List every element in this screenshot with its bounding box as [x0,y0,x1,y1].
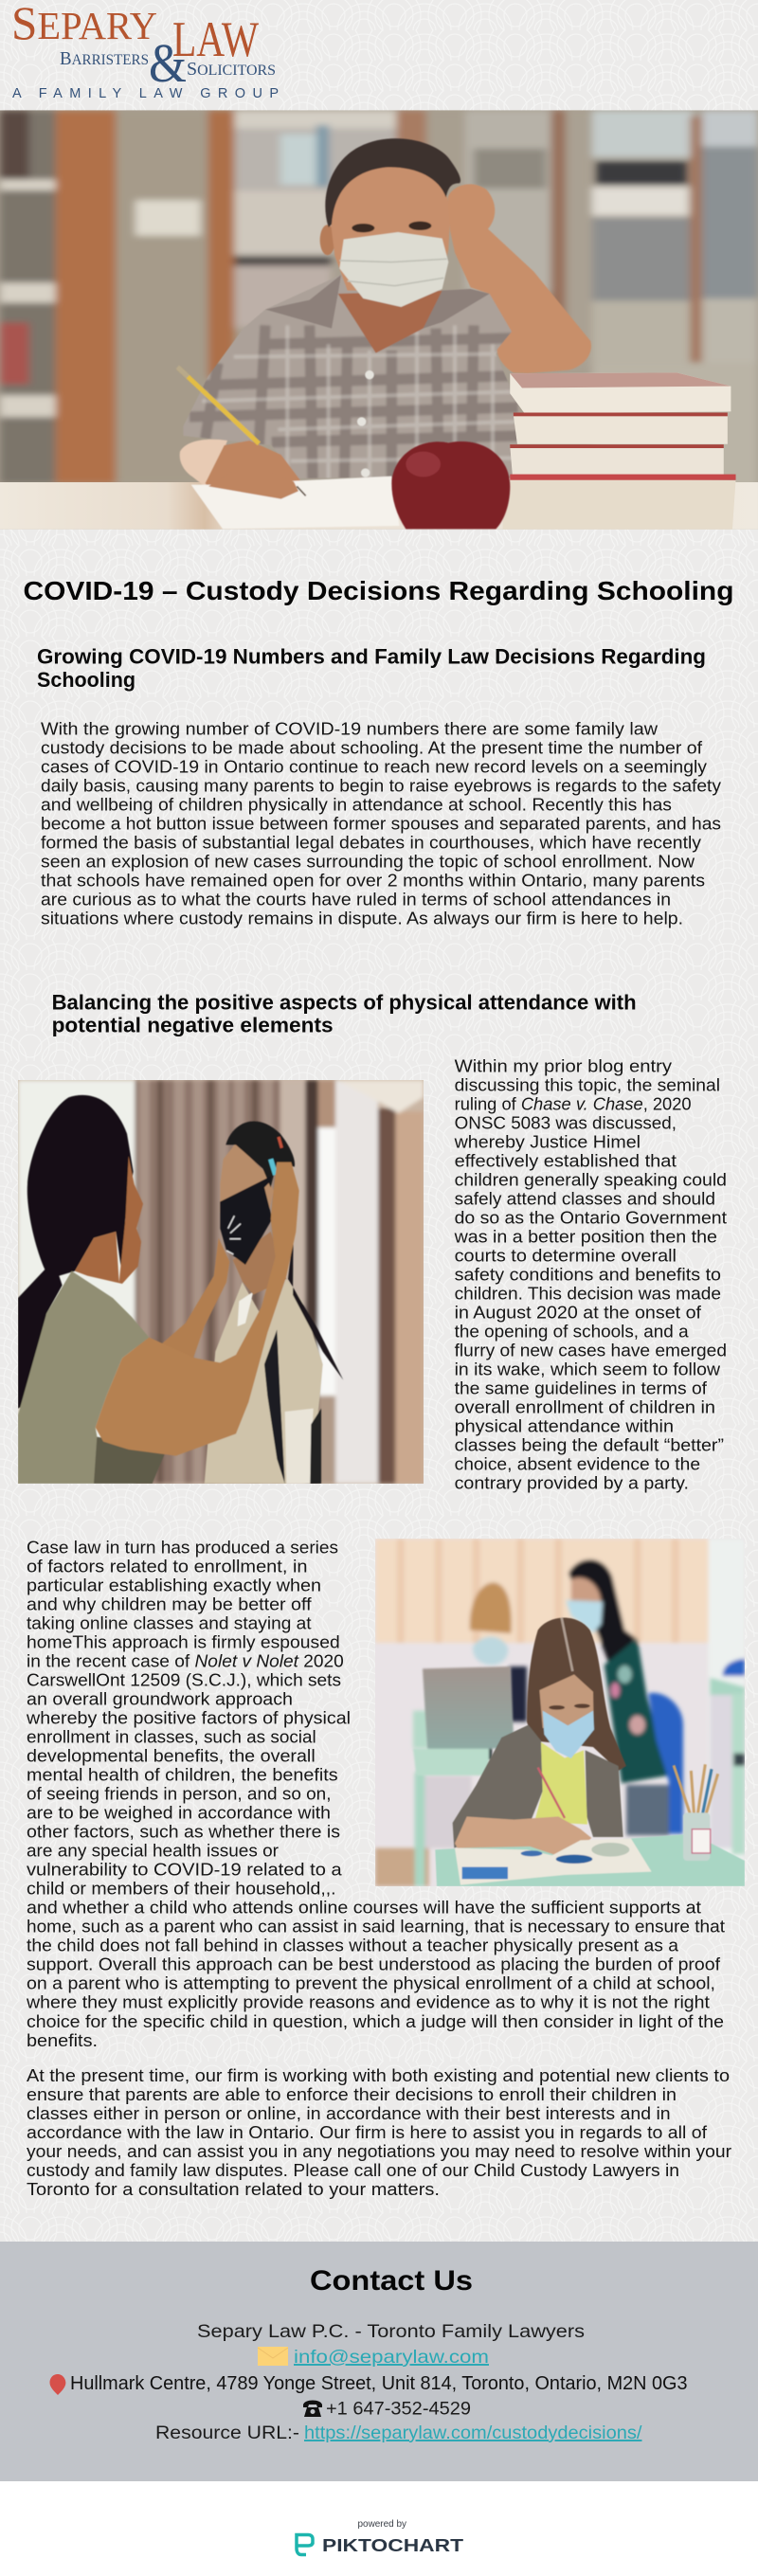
mask [543,1711,594,1758]
pencil [538,1768,565,1818]
bent arm and fist [448,184,591,373]
girl hair and ponytail [226,1121,295,1187]
woman hair [18,1095,134,1409]
footer: powered by piktochart [297,2518,464,2555]
icon: piktochart logo [297,2535,313,2554]
mask [339,232,448,307]
eyes [352,224,374,232]
arm [455,1816,591,1854]
pencil [178,368,259,443]
collar and neck [338,291,448,353]
text block: case law paragraph: are to be weighed in accordance with [27,1802,331,1822]
shirt [184,278,519,478]
text block: case law paragraph: CarswellOnt 12509 (S.C.J.), which sets [27,1669,341,1689]
text block: Chase v. Chase column: contrary provided by a party. [455,1473,689,1493]
text block: closing paragraph: classes either in person or online, in accordance with their best interests and in [27,2103,671,2123]
text block: Chase v. Chase column: children. This decision was made [455,1284,721,1304]
heading: growing numbers: Schooling [37,668,135,692]
title: COVID-19 – Custody Decisions Regarding Schooling [23,576,734,605]
laptop [413,1666,514,1775]
text block: Chase v. Chase column [454,1056,727,1493]
text block: case law paragraph: of seeing friends in person, and so on, [27,1783,332,1803]
heading: balancing aspects: Balancing the positive aspects of physical attendance with [52,990,637,1014]
text block: intro paragraph [41,719,722,928]
contact heading: Contact Us [310,2265,473,2297]
notebook [191,477,400,529]
text block: intro paragraph: cases of COVID-19 in Ontario continue to reach new record levels on a seemingly [41,757,708,777]
woman face [75,1156,143,1284]
icon: map pin [49,2374,65,2395]
text block: Chase v. Chase column: was in a better position then the [454,1227,717,1247]
text block: intro paragraph: formed the basis of substantial legal debates in courthouses, which have recently [41,833,702,853]
text block: Chase v. Chase column: ONSC 5083 was discussed, [455,1113,677,1133]
book [455,1839,652,1885]
heading: balancing aspects [52,990,637,1036]
text block: case law paragraph: support. Overall this approach can be best understood as placing the burden of proof [27,1954,721,1973]
girl shirt [205,1279,323,1484]
text block: case law paragraph: taking online classes and staying at [27,1612,312,1632]
text block: case law paragraph: the child does not fall behind in classes without a teacher physically present as a [27,1935,679,1955]
text block: case law paragraph: particular establishing exactly when [27,1575,321,1594]
ear [320,225,335,255]
text block: intro paragraph: and wellbeing of children physically in attendance at school. Recently this has [41,795,672,815]
text block: intro paragraph: that schools have remained open for over 2 months within Ontario, many parents [41,871,705,891]
boy [171,138,591,529]
panel: footer [0,2481,758,2576]
text block: Chase v. Chase column: the same guidelines in terms of [455,1378,708,1398]
firm name: Separy Law P.C. - Toronto Family Lawyers [197,2321,585,2342]
text block: Chase v. Chase column: physical attendance within [455,1416,674,1436]
email link: info@separylaw.com [294,2347,489,2368]
text block: Chase v. Chase column: ruling of Chase v. Chase, 2020 [455,1094,692,1114]
heading: growing numbers [37,645,706,692]
text block: Chase v. Chase column: safely attend classes and should [455,1189,715,1209]
photo: mother fitting mask on daughter [18,1080,424,1484]
text block: Chase v. Chase column: the opening of schools, and a [455,1322,689,1342]
logo: Separy Law [11,0,279,101]
text block: case law paragraph: benefits. [27,2030,98,2050]
text block: case law paragraph: in the recent case of Nolet v Nolet 2020 [27,1650,344,1670]
face [330,166,450,291]
text block: case law paragraph: whereby the positive factors of physical [26,1707,351,1727]
icon: envelope [258,2347,288,2366]
text block: closing paragraph: ensure that parents are able to enforce their decisions to enroll their children in [27,2084,677,2104]
hair [325,138,460,227]
text block: Chase v. Chase column: choice, absent evidence to the [455,1454,700,1474]
shirt shadow under arm [94,1437,167,1484]
yellow top [534,1742,587,1825]
far arm [162,1238,229,1358]
photo: boy in mask at library desk [0,110,758,530]
text block: case law paragraph: an overall groundwork approach [27,1688,293,1708]
text block: case law paragraph: are any special health issues or [27,1840,279,1860]
text block: case law paragraph: where they must explicitly provide reasons and evidence as to why it is not the right [26,1992,710,2012]
text block: closing paragraph: custody and family law disputes. Please call one of our Child Custody Lawyers in [27,2160,679,2180]
text block: case law paragraph: Case law in turn has produced a series [27,1537,338,1557]
logo: Separy Law: LAW [172,12,259,67]
footer: powered by piktochart: PIKTOCHART [322,2535,464,2555]
logo: Separy Law: SOLICITORS [187,59,276,80]
text block: Chase v. Chase column: Within my prior blog entry [455,1056,673,1076]
cardigan [453,1725,623,1848]
text block: case law paragraph: vulnerability to COVID-19 related to a [27,1859,342,1879]
text block: Chase v. Chase column: do so as the Ontario Government [455,1208,727,1228]
text block: closing paragraph: At the present time, our firm is working with both existing and potential new clients to [27,2065,730,2085]
icon: telephone [303,2401,322,2417]
footer: powered by piktochart: powered by [358,2518,407,2530]
photo: girl writing in classroom [375,1539,745,1886]
text block: intro paragraph: custody decisions to be made about schooling. At the present time the number of [41,738,703,758]
text block: case law paragraph: other factors, such as whether there is [27,1821,340,1841]
text block: case law paragraph: and whether a child who attends online courses will have the sufficient supports at [27,1897,701,1917]
text block: case law paragraph: enrollment in classes, such as social [27,1726,316,1746]
text block: Chase v. Chase column: courts to determine overall [455,1246,677,1266]
logo: Separy Law: A FAMILY LAW GROUP [12,86,279,101]
text block: case law paragraph: on a parent who is attempting to prevent the physical enrollment of a child at school, [27,1973,715,1992]
text block: Chase v. Chase column: effectively established that [455,1151,677,1171]
apple [391,441,510,529]
library background [0,110,758,530]
text block: case law paragraph: home, such as a parent who can assist in said learning, that is necessary to ensure that [27,1916,725,1936]
text block: case law paragraph: choice for the specific child in question, which a judge will then consider in light of the [27,2011,724,2031]
logo: Separy Law: BARRISTERS [60,48,149,69]
text block: closing paragraph [27,2065,731,2199]
phone number: +1 647-352-4529 [326,2399,471,2420]
text block: Chase v. Chase column: discussing this topic, the seminal [455,1075,720,1095]
text block: Chase v. Chase column: in its wake, which seem to follow [455,1360,721,1379]
text block: closing paragraph: your needs, and can assist you in any negotiations you may need to resolve within your [27,2141,731,2161]
text block: case law paragraph: child or members of their household,,. [27,1878,336,1898]
text block: Chase v. Chase column: children generally speaking could [455,1170,727,1190]
backpack strap [264,1329,285,1484]
text block: intro paragraph: With the growing number of COVID-19 numbers there are some family law [41,719,659,739]
text block: case law paragraph: homeThis approach is firmly espoused [27,1631,340,1651]
panel: contact us [0,2242,758,2481]
text block: case law paragraph: developmental benefits, the overall [27,1745,316,1765]
resource link: https://separylaw.com/custodydecisions/ [304,2423,642,2443]
resource label: Resource URL:- [155,2423,299,2443]
heading: growing numbers: Growing COVID-19 Numbers and Family Law Decisions Regarding [37,645,706,669]
book stack [503,372,736,530]
text block: Chase v. Chase column: in August 2020 at the onset of [455,1303,702,1323]
text block: Chase v. Chase column: safety conditions and benefits to [455,1265,721,1285]
desk [435,1834,745,1886]
text block: case law paragraph: of factors related to enrollment, in [27,1556,307,1576]
text block: intro paragraph: daily basis, causing many parents to begin to raise eyebrows is regards to the safety [41,776,722,796]
writing hand [180,440,227,490]
teacher [568,1559,636,1668]
pencil jar [674,1764,718,1816]
text block: case law paragraph: mental health of children, the benefits [27,1764,338,1784]
text block: intro paragraph: become a hot button issue between former spouses and separated parents, and has [41,814,721,834]
text block: Chase v. Chase column: overall enrollment of children in [455,1397,715,1417]
text block: intro paragraph: situations where custody remains in dispute. As always our firm is here to help. [41,909,683,928]
clip [271,1159,276,1175]
text block: Chase v. Chase column: whereby Justice Himel [454,1132,641,1152]
girl neck and face [233,1232,286,1295]
heading: balancing aspects: potential negative elements [52,1013,334,1036]
face [539,1674,594,1728]
text block: intro paragraph: seen an explosion of new cases surrounding the topic of school enrollment. Now [41,852,695,872]
hair [527,1618,626,1771]
black mask [220,1177,272,1265]
text block: case law paragraph [26,1537,725,2050]
text block: Chase v. Chase column: classes being the default “better” [455,1435,724,1455]
text block: closing paragraph: Toronto for a consultation related to your matters. [27,2179,440,2199]
logo: Separy Law: & [149,32,187,94]
blurred classroom background [375,1539,745,1886]
text block: intro paragraph: are curious as to what the courts have ruled in terms of school attendances in [41,890,671,910]
woman shirt [18,1271,160,1484]
near arm and hand [96,1162,299,1456]
address: Hullmark Centre, 4789 Yonge Street, Unit 814, Toronto, Ontario, M2N 0G3 [70,2373,688,2394]
boy in background [470,1583,512,1633]
text block: closing paragraph: accordance with the law in Ontario. Our firm is here to assist you in regards to all of [27,2122,708,2142]
text block: case law paragraph: and why children may be better off [27,1594,313,1613]
room and curtains [18,1080,424,1484]
text block: Chase v. Chase column: flurry of new cases have emerged [455,1341,727,1360]
